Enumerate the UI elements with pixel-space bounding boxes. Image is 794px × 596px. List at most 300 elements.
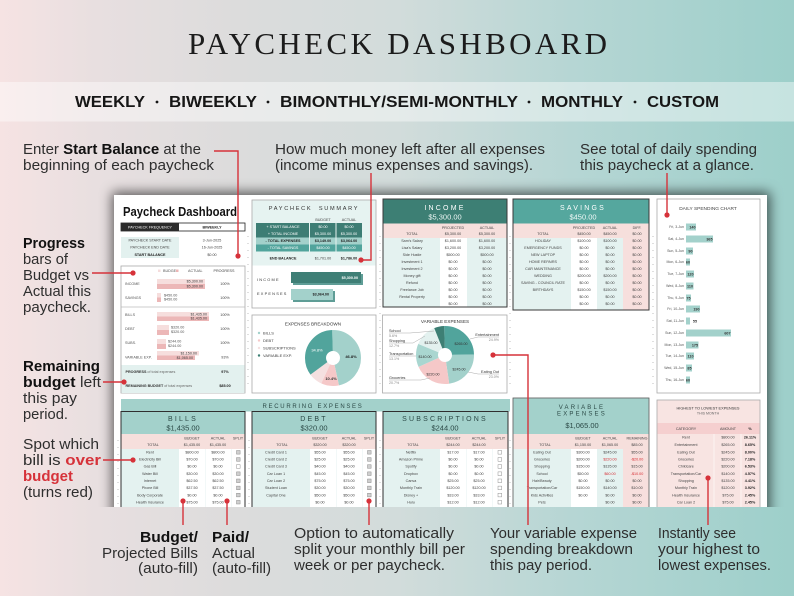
panel: debt: $50.00 xyxy=(343,493,355,497)
panel: income: Lisa's Salary xyxy=(402,246,423,250)
title: PAYCHECK DASHBOARD xyxy=(188,26,607,61)
decorative row ticks xyxy=(118,236,653,505)
panel: bills: $0.00 xyxy=(213,465,223,469)
panel: savings: $450.00 xyxy=(603,232,617,236)
panel: income: $0.00 xyxy=(482,260,492,264)
chart: daily spending: 60 xyxy=(686,378,690,382)
panel: subscriptions: ACTUAL xyxy=(472,436,486,440)
panel: income: $500.00 xyxy=(480,253,494,257)
panel: variable expenses table: $55.00 xyxy=(631,450,643,454)
callout: variable breakdown: Your variable expense xyxy=(490,526,637,542)
panel: savings: $0.00 xyxy=(632,239,642,243)
panel: savings: NEW LAPTOP xyxy=(531,253,556,257)
panel: variable expenses table: $200.00 xyxy=(576,458,590,462)
panel: paycheck summary: $3,149.00 xyxy=(315,239,331,243)
panel: subscriptions: $33.00 xyxy=(473,493,485,497)
panel: income: $1,600.00 xyxy=(479,239,495,243)
panel: subscriptions: Hulu xyxy=(407,500,415,504)
panel: savings: $0.00 xyxy=(579,302,589,306)
callout: variable breakdown xyxy=(490,526,637,574)
callout: over budget: (turns red) xyxy=(23,485,93,501)
panel: progress bars: $450.00 xyxy=(164,298,177,302)
panel: variable expenses: $135.00 xyxy=(424,341,438,345)
panel: savings: $0.00 xyxy=(579,267,589,271)
panel: highest to lowest expenses: Health Insurance xyxy=(672,493,700,497)
callout: over budget xyxy=(23,437,101,501)
panel: variable expenses table: $1,065.00 xyxy=(602,443,618,447)
chart: daily spending: Fri, 10-Jun xyxy=(667,307,684,311)
panel: subscriptions: $33.00 xyxy=(447,493,459,497)
panel: savings: $450.00 xyxy=(569,212,597,222)
panel: progress bars: VARIABLE EXP. xyxy=(125,356,152,360)
callout: progress: bars of xyxy=(23,252,69,268)
panel: savings: $100.00 xyxy=(577,239,591,243)
panel: paycheck summary: - TOTAL SAVINGS xyxy=(268,246,299,250)
panel: bills: Body Corporate xyxy=(137,493,163,497)
panel: bills: $1,435.00 xyxy=(166,424,200,432)
panel: savings: WEDDING xyxy=(534,274,552,278)
panel: debt: DEBT xyxy=(300,416,328,423)
panel: highest to lowest expenses: $265.00 xyxy=(721,443,735,447)
callout: highest to lowest: your highest to xyxy=(658,542,760,558)
panel: subscriptions: $120.00 xyxy=(472,486,486,490)
panel: bills: $62.50 xyxy=(186,479,198,483)
panel: bills: ACTUAL xyxy=(211,436,225,440)
panel: variable expenses table: REMAINING xyxy=(627,436,648,440)
panel: subscriptions: $244.00 xyxy=(431,424,459,432)
panel: subscriptions: $0.00 xyxy=(474,472,484,476)
panel: paycheck summary: $450.00 xyxy=(342,246,356,250)
panel: bills: $0.00 xyxy=(187,493,197,497)
panel: highest to lowest expenses: 3.92% xyxy=(745,486,756,490)
panel: variable expenses table: $85.00 xyxy=(631,443,643,447)
panel: progress bars: INCOME xyxy=(125,282,140,286)
panel: bills: SPLIT xyxy=(233,436,244,440)
panel: variable expenses table: $0.00 xyxy=(632,493,642,497)
panel: highest to lowest expenses: Monthly Train xyxy=(675,486,697,490)
panel: income: $5,300.00 xyxy=(445,232,461,236)
panel: variable expenses table: Pets xyxy=(538,500,546,504)
panel: debt xyxy=(252,412,376,512)
panel: income: $0.00 xyxy=(482,267,492,271)
paycheck settings block: START BALANCE xyxy=(134,253,166,257)
panel: bills: TOTAL xyxy=(147,443,159,447)
panel: variable expenses table: Shopping xyxy=(534,465,550,469)
panel: variable expenses table: $50.00 xyxy=(577,472,589,476)
panel: highest to lowest expenses: 4.57% xyxy=(745,472,756,476)
panel: variable expenses: 23.0% xyxy=(489,375,500,379)
panel: subscriptions: $244.00 xyxy=(472,443,486,447)
panel: subscriptions: $12.00 xyxy=(473,500,485,504)
panel: highest to lowest expenses: $200.00 xyxy=(721,465,735,469)
panel: debt: ACTUAL xyxy=(342,436,356,440)
panel: subscriptions: TOTAL xyxy=(407,443,419,447)
panel: variable expenses: VARIABLE EXPENSES xyxy=(421,319,469,324)
panel: savings: HOME REPAIRS xyxy=(529,260,558,264)
panel: savings: $0.00 xyxy=(579,295,589,299)
panel: paycheck summary: - TOTAL EXPENSES xyxy=(265,239,301,243)
callout: highest to lowest: Instantly see xyxy=(658,526,736,542)
callout: over budget: Spot which xyxy=(23,437,99,453)
panel: progress bars: $320.00 xyxy=(171,330,184,334)
panel: savings: $0.00 xyxy=(632,260,642,264)
panel: savings: $0.00 xyxy=(632,246,642,250)
panel: variable expenses table: $220.00 xyxy=(603,458,617,462)
panel: bills: BUDGET xyxy=(184,436,200,440)
panel: savings: EMERGENCY FUNDS xyxy=(524,246,562,250)
panel: bills: Electricity Bill xyxy=(139,458,161,462)
panel: variable expenses: School xyxy=(389,329,401,333)
panel: savings: $0.00 xyxy=(632,302,642,306)
panel: variable expenses table: $140.00 xyxy=(603,486,617,490)
panel: debt: Credit Card 2 xyxy=(265,458,287,462)
panel: subscriptions: $0.00 xyxy=(448,458,458,462)
panel: variable expenses: 12.7% xyxy=(389,344,400,348)
panel: progress bars: $320.00 xyxy=(171,326,184,330)
panel: debt: $75.00 xyxy=(314,479,326,483)
panel: progress bars: 100% xyxy=(220,282,230,286)
panel: bills: $70.00 xyxy=(212,458,224,462)
panel: progress bars: $244.00 xyxy=(168,344,181,348)
panel: income: $0.00 xyxy=(448,267,458,271)
panel: savings: $150.00 xyxy=(577,288,591,292)
panel: progress bars: $1,065.00 xyxy=(177,356,193,360)
panel: bills: Water Bill xyxy=(142,472,158,476)
chart: daily spending: Sat, 4-Jun xyxy=(668,237,684,241)
panel: highest to lowest expenses: Entertainment xyxy=(675,443,697,447)
panel: income: $0.00 xyxy=(448,302,458,306)
panel: bills: $70.00 xyxy=(186,458,198,462)
panel: savings: DIFF. xyxy=(633,226,642,230)
panel: bills: $800.00 xyxy=(211,450,225,454)
panel: debt: Credit Card 1 xyxy=(265,450,287,454)
panel: progress bars: SAVINGS xyxy=(125,296,142,300)
panel: highest to lowest expenses: CATEGORY xyxy=(676,427,697,431)
callout: highest to lowest: lowest expenses. xyxy=(658,558,771,574)
panel: subscriptions xyxy=(383,412,508,512)
panel: subscriptions: $244.00 xyxy=(446,443,460,447)
callout: progress: paycheck. xyxy=(23,300,91,316)
panel: subscriptions: Disney + xyxy=(404,493,418,497)
panel: variable expenses table: ACTUAL xyxy=(603,436,617,440)
panel: variable expenses table: $0.00 xyxy=(632,500,642,504)
panel: savings: $0.00 xyxy=(605,267,615,271)
paycheck settings block: 3-Jun-2025 xyxy=(203,238,221,242)
panel: paycheck summary: $0.00 xyxy=(318,225,328,229)
panel: progress bars: $1,150.00 xyxy=(181,352,197,356)
panel: bills: $30.00 xyxy=(212,472,224,476)
panel: bills: Gas Bill xyxy=(144,465,157,469)
panel: expenses breakdown: DEBT xyxy=(263,338,274,343)
panel: savings: $0.00 xyxy=(579,253,589,257)
frequency banner: CUSTOM xyxy=(647,94,719,111)
panel: bills xyxy=(121,412,245,512)
panel: variable expenses table: TOTAL xyxy=(539,443,551,447)
chart: daily spending: Fri, 3-Jun xyxy=(669,225,684,229)
chart: daily spending: Thu, 16-Jun xyxy=(665,378,684,382)
panel: subscriptions: BUDGET xyxy=(445,436,461,440)
panel: variable expenses table: Hair/Beauty xyxy=(532,479,552,483)
panel: bills: $37.50 xyxy=(212,486,224,490)
donut: variable expenses xyxy=(427,337,463,373)
panel: debt: Car Loan 1 xyxy=(267,472,285,476)
chart: daily spending: DAILY SPENDING CHART xyxy=(679,206,737,212)
panel: highest to lowest expenses: 8.65% xyxy=(745,443,756,447)
paycheck settings block: 16-Jun-2025 xyxy=(202,246,222,250)
panel: paycheck summary: + START BALANCE xyxy=(266,225,300,229)
panel: income: TOTAL xyxy=(406,232,418,236)
panel: expenses breakdown: 46.8% xyxy=(345,354,357,359)
callout: budget bills xyxy=(102,530,198,577)
callout: progress: Actual this xyxy=(23,284,91,300)
panel: progress bars: SUBS. xyxy=(125,341,136,345)
callout: paid actual: Actual xyxy=(212,546,255,562)
panel: savings: TOTAL xyxy=(537,232,549,236)
panel: subscriptions: $25.00 xyxy=(473,479,485,483)
panel: savings: $0.00 xyxy=(632,267,642,271)
frequency banner: BIMONTHLY/SEMI-MONTHLY xyxy=(280,94,519,111)
panel: expenses breakdown: 10.4% xyxy=(325,376,337,381)
panel: debt: $45.00 xyxy=(343,472,355,476)
panel: highest to lowest expenses: 4.41% xyxy=(745,479,756,483)
panel: variable expenses table: $0.00 xyxy=(578,493,588,497)
panel: bills: $0.00 xyxy=(187,465,197,469)
callout: progress xyxy=(23,236,91,316)
panel: income: ACTUAL xyxy=(480,226,494,230)
callout: start balance xyxy=(23,142,215,174)
panel: savings: $200.00 xyxy=(577,274,591,278)
chart: daily spending: Tue, 14-Jun xyxy=(665,354,684,358)
panel: paycheck summary: EXPENSES xyxy=(257,291,288,296)
panel: paycheck summary: $1,701.00 xyxy=(315,256,331,260)
panel: savings: $200.00 xyxy=(603,274,617,278)
panel: expenses breakdown: VARIABLE EXP. xyxy=(263,353,292,358)
chart: daily spending: Wed, 15-Jun xyxy=(664,366,684,370)
panel: subscriptions: Spotify xyxy=(405,465,417,469)
panel: debt: $25.00 xyxy=(314,458,326,462)
chart: daily spending: 140 xyxy=(689,225,696,229)
panel: savings: $150.00 xyxy=(603,288,617,292)
panel: income: $3,200.00 xyxy=(479,246,495,250)
panel: bills: BILLS xyxy=(168,416,198,423)
chart: daily spending: 75 xyxy=(686,296,690,300)
callout: daily spending xyxy=(580,142,757,174)
panel: variable expenses table: $15.00 xyxy=(631,465,643,469)
panel: progress bars: 100% xyxy=(220,341,230,345)
chart: daily spending: Thu, 9-Jun xyxy=(667,296,684,300)
panel: expenses breakdown: EXPENSES BREAKDOWN xyxy=(285,322,341,326)
panel: savings: ACTUAL xyxy=(603,226,617,230)
chart: daily spending: 190 xyxy=(693,307,700,311)
panel: debt: $40.00 xyxy=(314,465,326,469)
arrows: red pointers xyxy=(92,151,708,525)
panel: variable expenses table: $1,065.00 xyxy=(565,421,599,430)
panel: debt: $320.00 xyxy=(300,424,328,432)
panel: bills: Phone Bill xyxy=(142,486,158,490)
panel: debt: $0.00 xyxy=(344,500,354,504)
panel: highest to lowest expenses: Groceries xyxy=(678,458,694,462)
panel: variable expenses table: $0.00 xyxy=(632,479,642,483)
panel: income: $0.00 xyxy=(448,288,458,292)
panel: highest to lowest expenses: 8.00% xyxy=(745,450,756,454)
panel: paycheck summary: $3,064.00 xyxy=(341,239,357,243)
panel: progress bars: BUDGET xyxy=(163,269,179,273)
panel: progress bars: REMAINING BUDGET of total expenses xyxy=(126,384,192,388)
callout: budget bills: Projected Bills xyxy=(102,546,198,562)
panel: savings: SAVING - COUNCIL RATE xyxy=(521,281,566,285)
panel: subscriptions: $25.00 xyxy=(447,479,459,483)
panel: debt: SPLIT xyxy=(364,436,375,440)
panel: progress bars: $1,435.00 xyxy=(191,312,207,316)
panel: subscriptions: Dropbox xyxy=(404,472,418,476)
panel: highest to lowest expenses: $135.00 xyxy=(721,479,735,483)
panel: savings: $0.00 xyxy=(632,274,642,278)
callout: progress: Progress xyxy=(23,236,85,252)
panel: highest to lowest expenses: Childcare xyxy=(678,465,694,469)
panel: savings: $0.00 xyxy=(605,295,615,299)
panel: progress bars: PROGRESS of total expenses xyxy=(126,370,175,374)
callout: split option: Option to automatically xyxy=(294,526,455,542)
chart: daily spending: 175 xyxy=(692,343,698,347)
panel: progress bars: 93% xyxy=(221,356,229,360)
panel: highest to lowest expenses: Rent xyxy=(682,436,690,440)
panel: highest to lowest expenses: 6.53% xyxy=(745,465,756,469)
panel: highest to lowest expenses: $220.00 xyxy=(721,458,735,462)
panel: paycheck summary: $450.00 xyxy=(316,246,330,250)
paycheck settings block: PAYCHECK END DATE xyxy=(130,246,170,250)
panel: income: Money gift xyxy=(403,274,421,278)
panel: savings: $450.00 xyxy=(577,232,591,236)
panel: paycheck summary: $0.00 xyxy=(344,225,354,229)
panel: paycheck summary: PAYCHECK SUMMARY xyxy=(269,206,359,212)
panel: income: $3,200.00 xyxy=(445,246,461,250)
frequency banner xyxy=(0,82,794,122)
callout: money left: How much money left after all expenses xyxy=(275,142,545,158)
panel: subscriptions: $0.00 xyxy=(448,472,458,476)
paycheck settings block xyxy=(121,223,245,258)
panel: income: $0.00 xyxy=(448,281,458,285)
frequency banner: MONTHLY xyxy=(541,94,624,111)
panel: debt: $55.00 xyxy=(343,450,355,454)
dashboard title: Paycheck Dashboard xyxy=(123,204,237,219)
panel: debt: $40.00 xyxy=(343,465,355,469)
panel: income: $5,300.00 xyxy=(428,212,462,222)
panel: savings: $0.00 xyxy=(605,260,615,264)
panel: variable expenses: 5.6% xyxy=(389,334,398,338)
panel: savings: PROJECTED xyxy=(573,226,595,230)
panel: bills: $1,435.00 xyxy=(210,443,226,447)
arrow dots xyxy=(121,212,711,504)
panel: bills: Internet xyxy=(144,479,156,483)
callout: remaining budget: budget left xyxy=(23,375,101,391)
panel: savings: $0.00 xyxy=(632,253,642,257)
panel: income: $0.00 xyxy=(448,295,458,299)
panel: variable expenses table: -$20.00 xyxy=(631,458,643,462)
panel: bills: Health Insurance xyxy=(136,500,164,504)
callout: progress: Budget vs xyxy=(23,268,89,284)
panel: variable expenses: Entertainment xyxy=(475,333,500,337)
callout: start balance: beginning of each paycheck xyxy=(23,158,215,174)
panel: savings: $0.00 xyxy=(605,281,615,285)
chart: daily spending: Wed, 8-Jun xyxy=(666,284,684,288)
panel: income: $0.00 xyxy=(482,288,492,292)
panel: expenses breakdown xyxy=(252,315,376,393)
panel: subscriptions: $0.00 xyxy=(474,458,484,462)
recurring expenses banner xyxy=(121,399,510,412)
callout: money left: (income minus expenses and savings). xyxy=(275,158,533,174)
panel: subscriptions: $0.00 xyxy=(448,465,458,469)
callout: paid actual xyxy=(212,530,271,577)
panel: progress bars: PROGRESS xyxy=(214,269,235,273)
panel: highest to lowest expenses: Eating Out xyxy=(677,450,695,454)
panel: subscriptions: Canva xyxy=(406,479,417,483)
panel: variable expenses table: $10.00 xyxy=(631,486,643,490)
panel: variable expenses table: $150.00 xyxy=(576,486,590,490)
panel: highest to lowest expenses: % xyxy=(748,427,752,431)
panel: paycheck summary: $3,064.00 xyxy=(313,292,329,296)
callout: remaining budget: this pay xyxy=(23,391,78,407)
callout: daily spending: this paycheck at a glance. xyxy=(580,158,754,174)
panel: savings: $0.00 xyxy=(579,246,589,250)
panel: variable expenses table: $0.00 xyxy=(605,493,615,497)
panel: debt: $320.00 xyxy=(313,443,327,447)
panel: savings: BIRTHDAYS xyxy=(533,288,554,292)
panel: debt: Car Loan 2 xyxy=(267,479,285,483)
panel: savings: $0.00 xyxy=(632,288,642,292)
panel: highest to lowest expenses: $75.00 xyxy=(722,493,734,497)
panel: paycheck summary: END BALANCE xyxy=(270,256,297,260)
chart: daily spending: Sun, 5-Jun xyxy=(667,249,684,253)
panel: subscriptions: Monthly Train xyxy=(400,486,422,490)
panel: subscriptions: Netflix xyxy=(406,450,416,454)
panel: bills: $1,435.00 xyxy=(184,443,200,447)
panel: paycheck summary: INCOME xyxy=(257,277,280,282)
recurring expenses banner: RECURRING EXPENSES xyxy=(263,404,363,410)
panel: variable expenses table: BUDGET xyxy=(575,436,591,440)
panel: savings: $0.00 xyxy=(605,302,615,306)
chart: daily spending xyxy=(657,199,760,393)
panel: progress bars: $5,300.00 xyxy=(187,280,203,284)
panel: progress bars: $1,435.00 xyxy=(191,317,207,321)
panel: income: Freelance Job xyxy=(400,288,424,292)
panel: variable expenses: $220.00 xyxy=(426,372,440,376)
panel: savings: $0.00 xyxy=(605,246,615,250)
callout: paid actual: Paid/ xyxy=(212,530,249,546)
panel: variable expenses table: $300.00 xyxy=(576,450,590,454)
callout: budget bills: (auto-fill) xyxy=(138,561,198,577)
dashboard sheet xyxy=(114,195,767,507)
panel: income: $0.00 xyxy=(482,281,492,285)
panel: paycheck summary: BUDGET xyxy=(315,218,331,222)
panel: income: $0.00 xyxy=(448,274,458,278)
panel: income: Rental Property xyxy=(399,295,425,299)
panel: debt: Capital One xyxy=(266,493,286,497)
panel: debt: $55.00 xyxy=(314,450,326,454)
callout: remaining budget: period. xyxy=(23,407,68,423)
chart: daily spending: Tue, 7-Jun xyxy=(667,272,684,276)
panel: paycheck summary: + TOTAL INCOME xyxy=(268,232,299,236)
paycheck settings block: PAYCHECK START DATE xyxy=(128,238,172,242)
panel: progress bars: BILLS xyxy=(125,313,136,317)
panel: highest to lowest expenses: AMOUNT xyxy=(720,427,737,431)
panel: variable expenses table: $0.00 xyxy=(605,479,615,483)
panel: income: Refund xyxy=(406,281,418,285)
panel: highest to lowest expenses: 2.45% xyxy=(745,493,756,497)
panel: variable expenses table: $0.00 xyxy=(605,500,615,504)
panel: bills: $75.00 xyxy=(212,500,224,504)
panel: variable expenses table: School xyxy=(536,472,548,476)
panel: variable expenses table: $150.00 xyxy=(576,465,590,469)
